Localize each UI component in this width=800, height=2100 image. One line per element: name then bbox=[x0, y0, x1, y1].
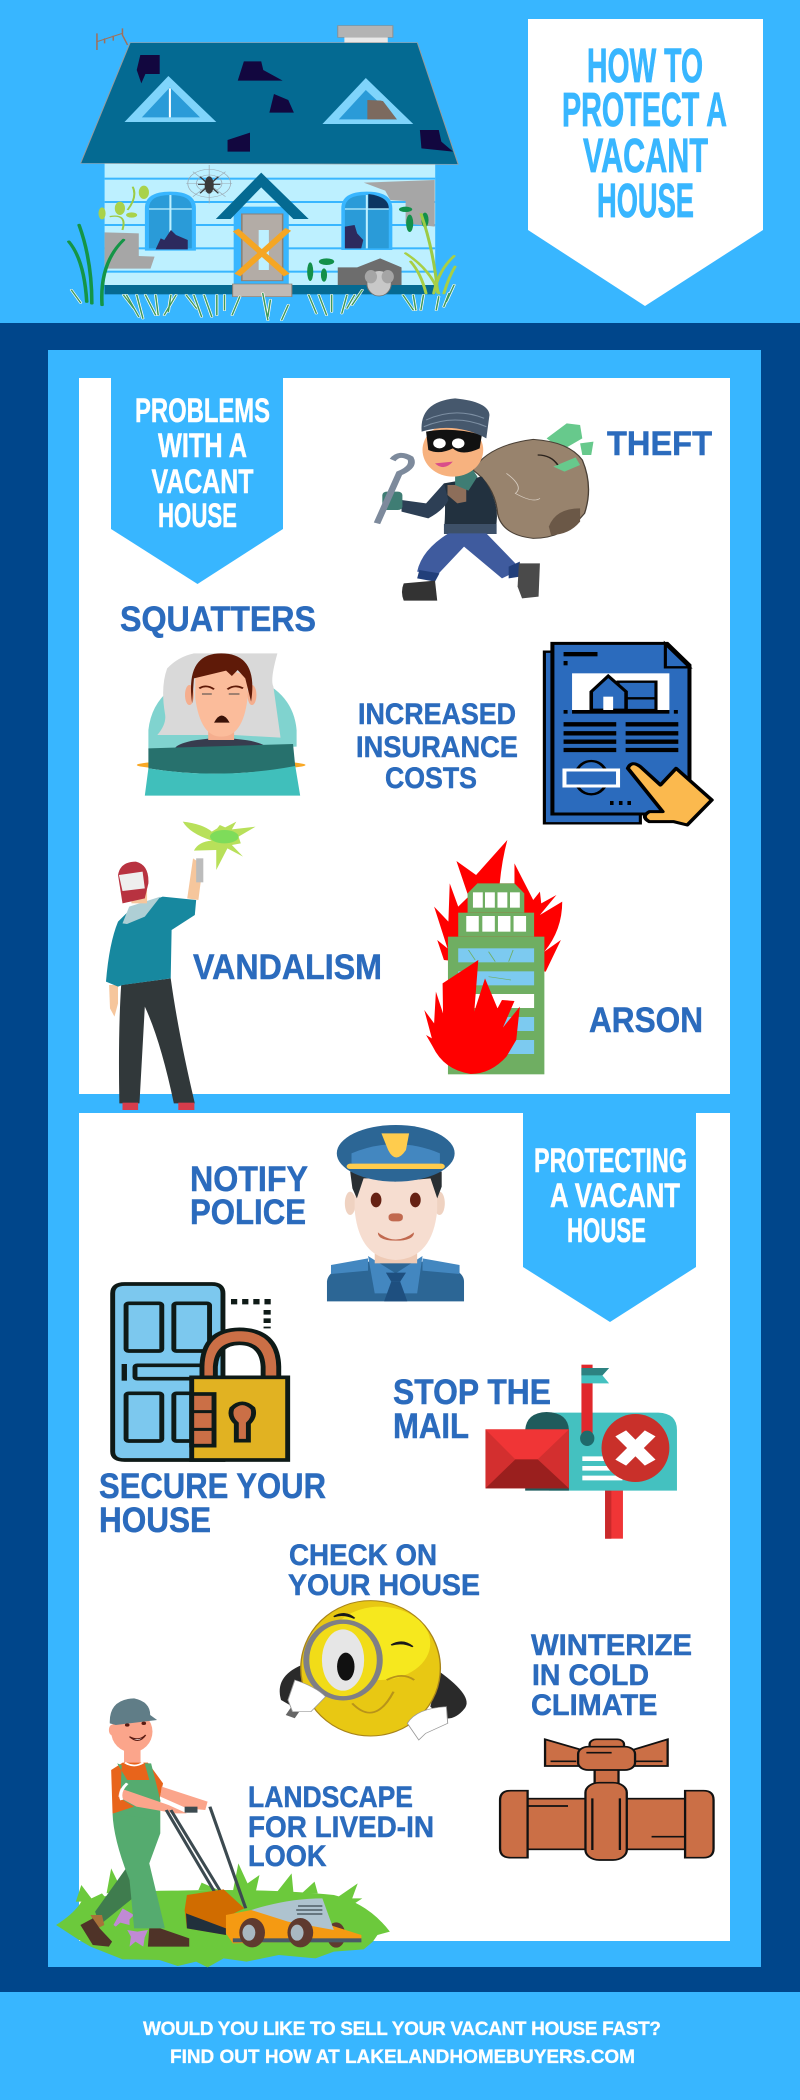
door bbox=[234, 207, 289, 284]
base bbox=[105, 285, 435, 294]
label: check on your house: CHECK ON bbox=[289, 1539, 437, 1572]
label: winterize in cold climate: WINTERIZE bbox=[531, 1629, 692, 1662]
thief body bbox=[444, 477, 497, 530]
mower bbox=[327, 1922, 345, 1948]
title: VACANT bbox=[583, 130, 708, 183]
illustration: winking emoji with magnifier bbox=[280, 1601, 467, 1740]
illustration: police officer bbox=[327, 1125, 464, 1301]
label: increased insurance costs: INCREASED bbox=[358, 698, 516, 731]
legs bbox=[119, 978, 195, 1103]
label: squatters: SQUATTERS bbox=[120, 600, 316, 639]
banner: protecting bbox=[523, 1113, 696, 1322]
grass mound bbox=[56, 1890, 390, 1967]
vines bbox=[110, 187, 134, 230]
banner: problems bbox=[111, 378, 283, 584]
label: landscape for lived-in look: FOR LIVED-IN bbox=[248, 1811, 434, 1844]
title banner bbox=[528, 19, 763, 306]
thief head bbox=[423, 423, 483, 477]
grass tufts bbox=[76, 1863, 362, 1905]
flowers bbox=[113, 1908, 134, 1927]
thief tool bbox=[377, 455, 411, 523]
arms bbox=[109, 985, 118, 1017]
paint splat bbox=[183, 822, 256, 870]
illustration: vacant house bbox=[69, 26, 458, 320]
heading: protecting: HOUSE bbox=[567, 1212, 646, 1250]
heading: problems: HOUSE bbox=[158, 497, 237, 535]
footer call to action bbox=[143, 2019, 661, 2068]
heading: protecting: PROTECTING bbox=[534, 1142, 687, 1180]
panel: problems bbox=[79, 378, 730, 1094]
label: secure your house bbox=[99, 1467, 326, 1540]
head bbox=[131, 890, 147, 903]
heading: problems: VACANT bbox=[152, 463, 254, 501]
footer call to action: WOULD YOU LIKE TO SELL YOUR VACANT HOUSE FAST? bbox=[143, 2019, 661, 2040]
label: check on your house: YOUR HOUSE bbox=[288, 1569, 480, 1602]
label: secure your house: HOUSE bbox=[99, 1501, 211, 1540]
label: notify police: POLICE bbox=[190, 1193, 306, 1232]
label: stop the mail: MAIL bbox=[393, 1407, 469, 1446]
label: increased insurance costs: COSTS bbox=[385, 762, 477, 795]
label: stop the mail: STOP THE bbox=[393, 1373, 551, 1412]
neck bbox=[124, 1747, 141, 1763]
front leg and overalls bbox=[113, 1800, 165, 1928]
illustration: graffiti vandal bbox=[106, 822, 256, 1110]
label: notify police: NOTIFY bbox=[190, 1160, 308, 1199]
label: landscape for lived-in look: LANDSCAPE bbox=[248, 1781, 413, 1814]
label: stop the mail bbox=[393, 1373, 551, 1446]
illustration: locked door bbox=[113, 1284, 288, 1460]
illustration: insurance document bbox=[544, 643, 712, 825]
light blue frame bbox=[48, 350, 761, 1967]
hoodie bbox=[106, 897, 196, 987]
window left bbox=[145, 192, 196, 251]
label: landscape for lived-in look: LOOK bbox=[248, 1840, 327, 1873]
torso bbox=[111, 1763, 163, 1813]
footer call to action: FIND OUT HOW AT LAKELANDHOMEBUYERS.COM bbox=[170, 2047, 635, 2068]
window right bbox=[341, 192, 392, 250]
label: vandalism: VANDALISM bbox=[193, 948, 382, 987]
title: HOUSE bbox=[597, 175, 694, 228]
label: notify police bbox=[190, 1160, 308, 1232]
illustration: sleeping squatter bbox=[137, 653, 306, 796]
heading: problems: PROBLEMS bbox=[135, 392, 270, 430]
label: arson: ARSON bbox=[589, 1001, 703, 1040]
title: HOW TO bbox=[587, 40, 703, 93]
label: landscape for lived-in look bbox=[248, 1781, 434, 1873]
head bbox=[111, 1711, 152, 1752]
back leg bbox=[95, 1867, 150, 1925]
illustration: gardener with lawn mower bbox=[56, 1698, 390, 1967]
label: theft: THEFT bbox=[607, 425, 712, 463]
web and spider bbox=[186, 165, 232, 203]
illustration: pipe valve bbox=[500, 1739, 714, 1860]
grass bbox=[69, 225, 455, 320]
illustration: burning building bbox=[424, 840, 562, 1074]
title bbox=[562, 40, 727, 228]
heading: problems: WITH A bbox=[158, 427, 247, 465]
label: increased insurance costs: INSURANCE bbox=[356, 731, 518, 764]
label: winterize in cold climate: CLIMATE bbox=[531, 1689, 658, 1722]
arm bbox=[118, 1788, 187, 1813]
panel: protecting bbox=[79, 1113, 730, 1941]
label: check on your house bbox=[288, 1539, 480, 1602]
heading: protecting bbox=[534, 1142, 687, 1250]
illustration: mailbox bbox=[485, 1365, 677, 1539]
illustration: thief bbox=[377, 398, 593, 601]
label: increased insurance costs bbox=[356, 698, 518, 795]
label: winterize in cold climate bbox=[531, 1629, 692, 1722]
mouse bbox=[367, 271, 391, 296]
dark blue band bbox=[0, 323, 800, 1992]
thief legs bbox=[417, 533, 520, 578]
label: winterize in cold climate: IN COLD bbox=[532, 1659, 649, 1692]
heading: protecting: A VACANT bbox=[550, 1177, 680, 1215]
label: secure your house: SECURE YOUR bbox=[99, 1467, 326, 1506]
heading: problems bbox=[135, 392, 270, 535]
